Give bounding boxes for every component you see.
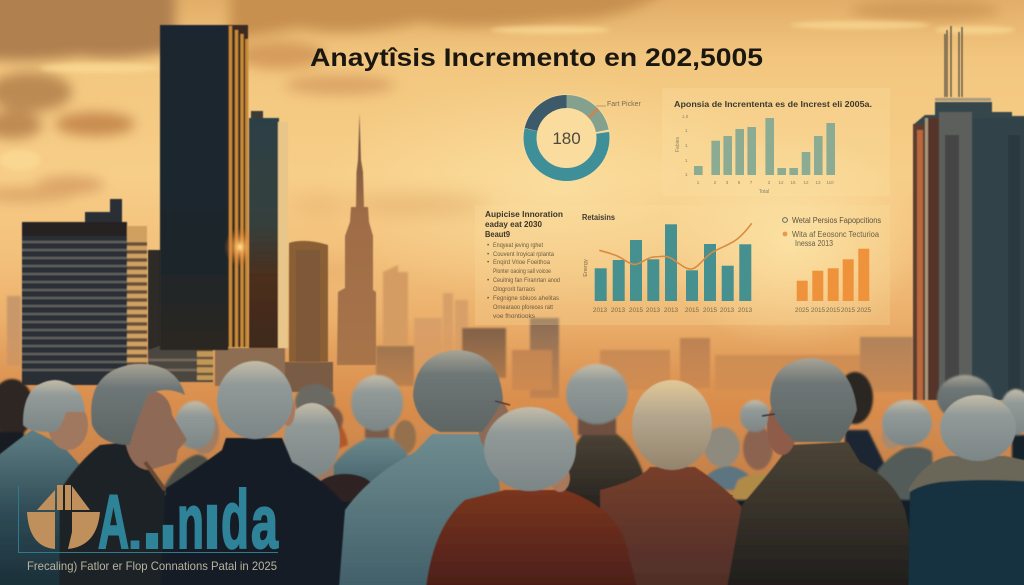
text block: Enqyeat jeving rghet [493,242,543,249]
combo bars [595,224,751,301]
text block: Plonter oaoing sall voicoe [493,268,551,275]
man with grey hair in profile [60,364,187,585]
distant skyline [7,265,913,398]
axis labels: 1 [685,172,688,177]
axis labels: 1 [685,158,688,163]
text block: • [487,251,489,258]
woman in front [425,407,640,585]
orange bar chart: 2015 [811,307,826,314]
logo wordmark: ı [160,510,176,557]
axis labels: 2 [714,180,717,185]
crowd base [0,495,1024,585]
clouds [0,0,1015,276]
text block [485,209,563,320]
text block: eaday eat 2030 [485,219,542,229]
donut value: 180 [552,129,581,148]
text block: voe fhontiooks [493,313,535,320]
title: Anaytîsis Incremento en 202,5005 [310,44,763,72]
bars [694,118,835,175]
horizon haze [0,320,1024,420]
text block: Ologrorit farraos [493,286,535,293]
axis labels: Total [759,189,769,195]
logo tagline: Frecaling) Fatlor er Flop Connations Patal in 2025 [27,559,277,573]
logo icon [27,485,100,549]
legend: Wetal Persios Fapopcitions [792,216,881,225]
text block: Enqird Vrioe Foeithoa [493,259,550,266]
text block: • [487,277,489,284]
logo wordmark: ı [131,537,139,551]
text block: Couvent Iroyical rplanta [493,251,554,258]
text block: • [487,242,489,249]
text block: • [487,295,489,302]
combo chart [582,213,753,314]
legend: Inessa 2013 [795,239,833,248]
logo wordmark: ı [144,524,160,554]
legend [783,216,881,248]
axis labels: 3 [726,180,729,185]
right tower [913,26,1024,400]
combo chart title: Retaisins [582,213,616,222]
combo axis labels: 2015 [685,307,700,314]
woman behind the central man [284,403,373,502]
logo wordmark: I [204,493,220,561]
text block: • [487,259,489,266]
man at far left [0,380,88,585]
axis labels: 12 [778,180,784,185]
tall tower [160,25,328,362]
combo axis labels: Energy [583,259,589,277]
axis labels: 15 [790,180,796,185]
combo axis labels: 2013 [593,307,608,314]
orange bar chart: 2025 [795,307,810,314]
text block: Ceuitnig fan Firanrtan anod [493,277,560,284]
combo axis labels: 2013 [611,307,626,314]
axis labels: 1 [685,128,688,133]
text block: Fegnigne sbiuos ahelitas [493,295,559,302]
combo axis labels: 2013 [738,307,753,314]
axis labels: 13 [815,180,821,185]
donut chart [522,94,642,182]
woman in navy coat [908,395,1024,585]
axis labels: 1 [697,180,700,185]
axis labels: 7 [750,180,753,185]
combo axis labels [583,259,753,314]
logo wordmark: n [177,479,204,565]
combo axis labels: 2013 [646,307,661,314]
text block: Beaut9 [485,230,511,239]
orange bar chart: 2025 [857,307,872,314]
trend line [599,223,752,269]
axis labels: Fabies [675,136,681,152]
axis labels: 2 [768,180,771,185]
logo wordmark [98,473,279,566]
axis labels: 12 [803,180,809,185]
axis labels: 1 [685,143,688,148]
logo [18,473,279,573]
axis labels: 5 [738,180,741,185]
orange bar chart [795,249,872,314]
chart title: Aponsia de Incrententa es de Increst eli 2005a. [674,99,872,109]
axis labels: 1.0 [682,114,689,119]
logo wordmark: a [251,480,279,564]
central spire [337,113,376,365]
man in dark coat [160,361,347,585]
panel: bar chart top [662,88,890,196]
combo axis labels: 2015 [703,307,718,314]
text block: Aupicise Innoration [485,209,563,219]
man with glasses [338,350,510,585]
combo axis labels: 2013 [664,307,679,314]
combo axis labels: 2015 [629,307,644,314]
axis labels [675,114,834,195]
crowd [0,350,1024,585]
orange bar chart: 2015 [841,307,856,314]
legend: Wita af Eeosonc Tecturioa [792,230,880,239]
orange bar chart: 2015 [826,307,841,314]
logo wordmark: A [98,480,129,565]
donut label: Fart Picker [607,101,642,108]
logo wordmark: d [221,473,249,566]
logo frame [18,486,278,552]
text block: Ornearaoo pforeces ratt [493,304,553,311]
back row people [0,364,1024,530]
left office block [22,199,333,392]
woman with pale hair [600,380,745,585]
axis labels: 110 [826,180,834,185]
panel: lower dashboard [475,205,890,325]
combo axis labels: 2013 [720,307,735,314]
man in brown coat [725,358,925,585]
